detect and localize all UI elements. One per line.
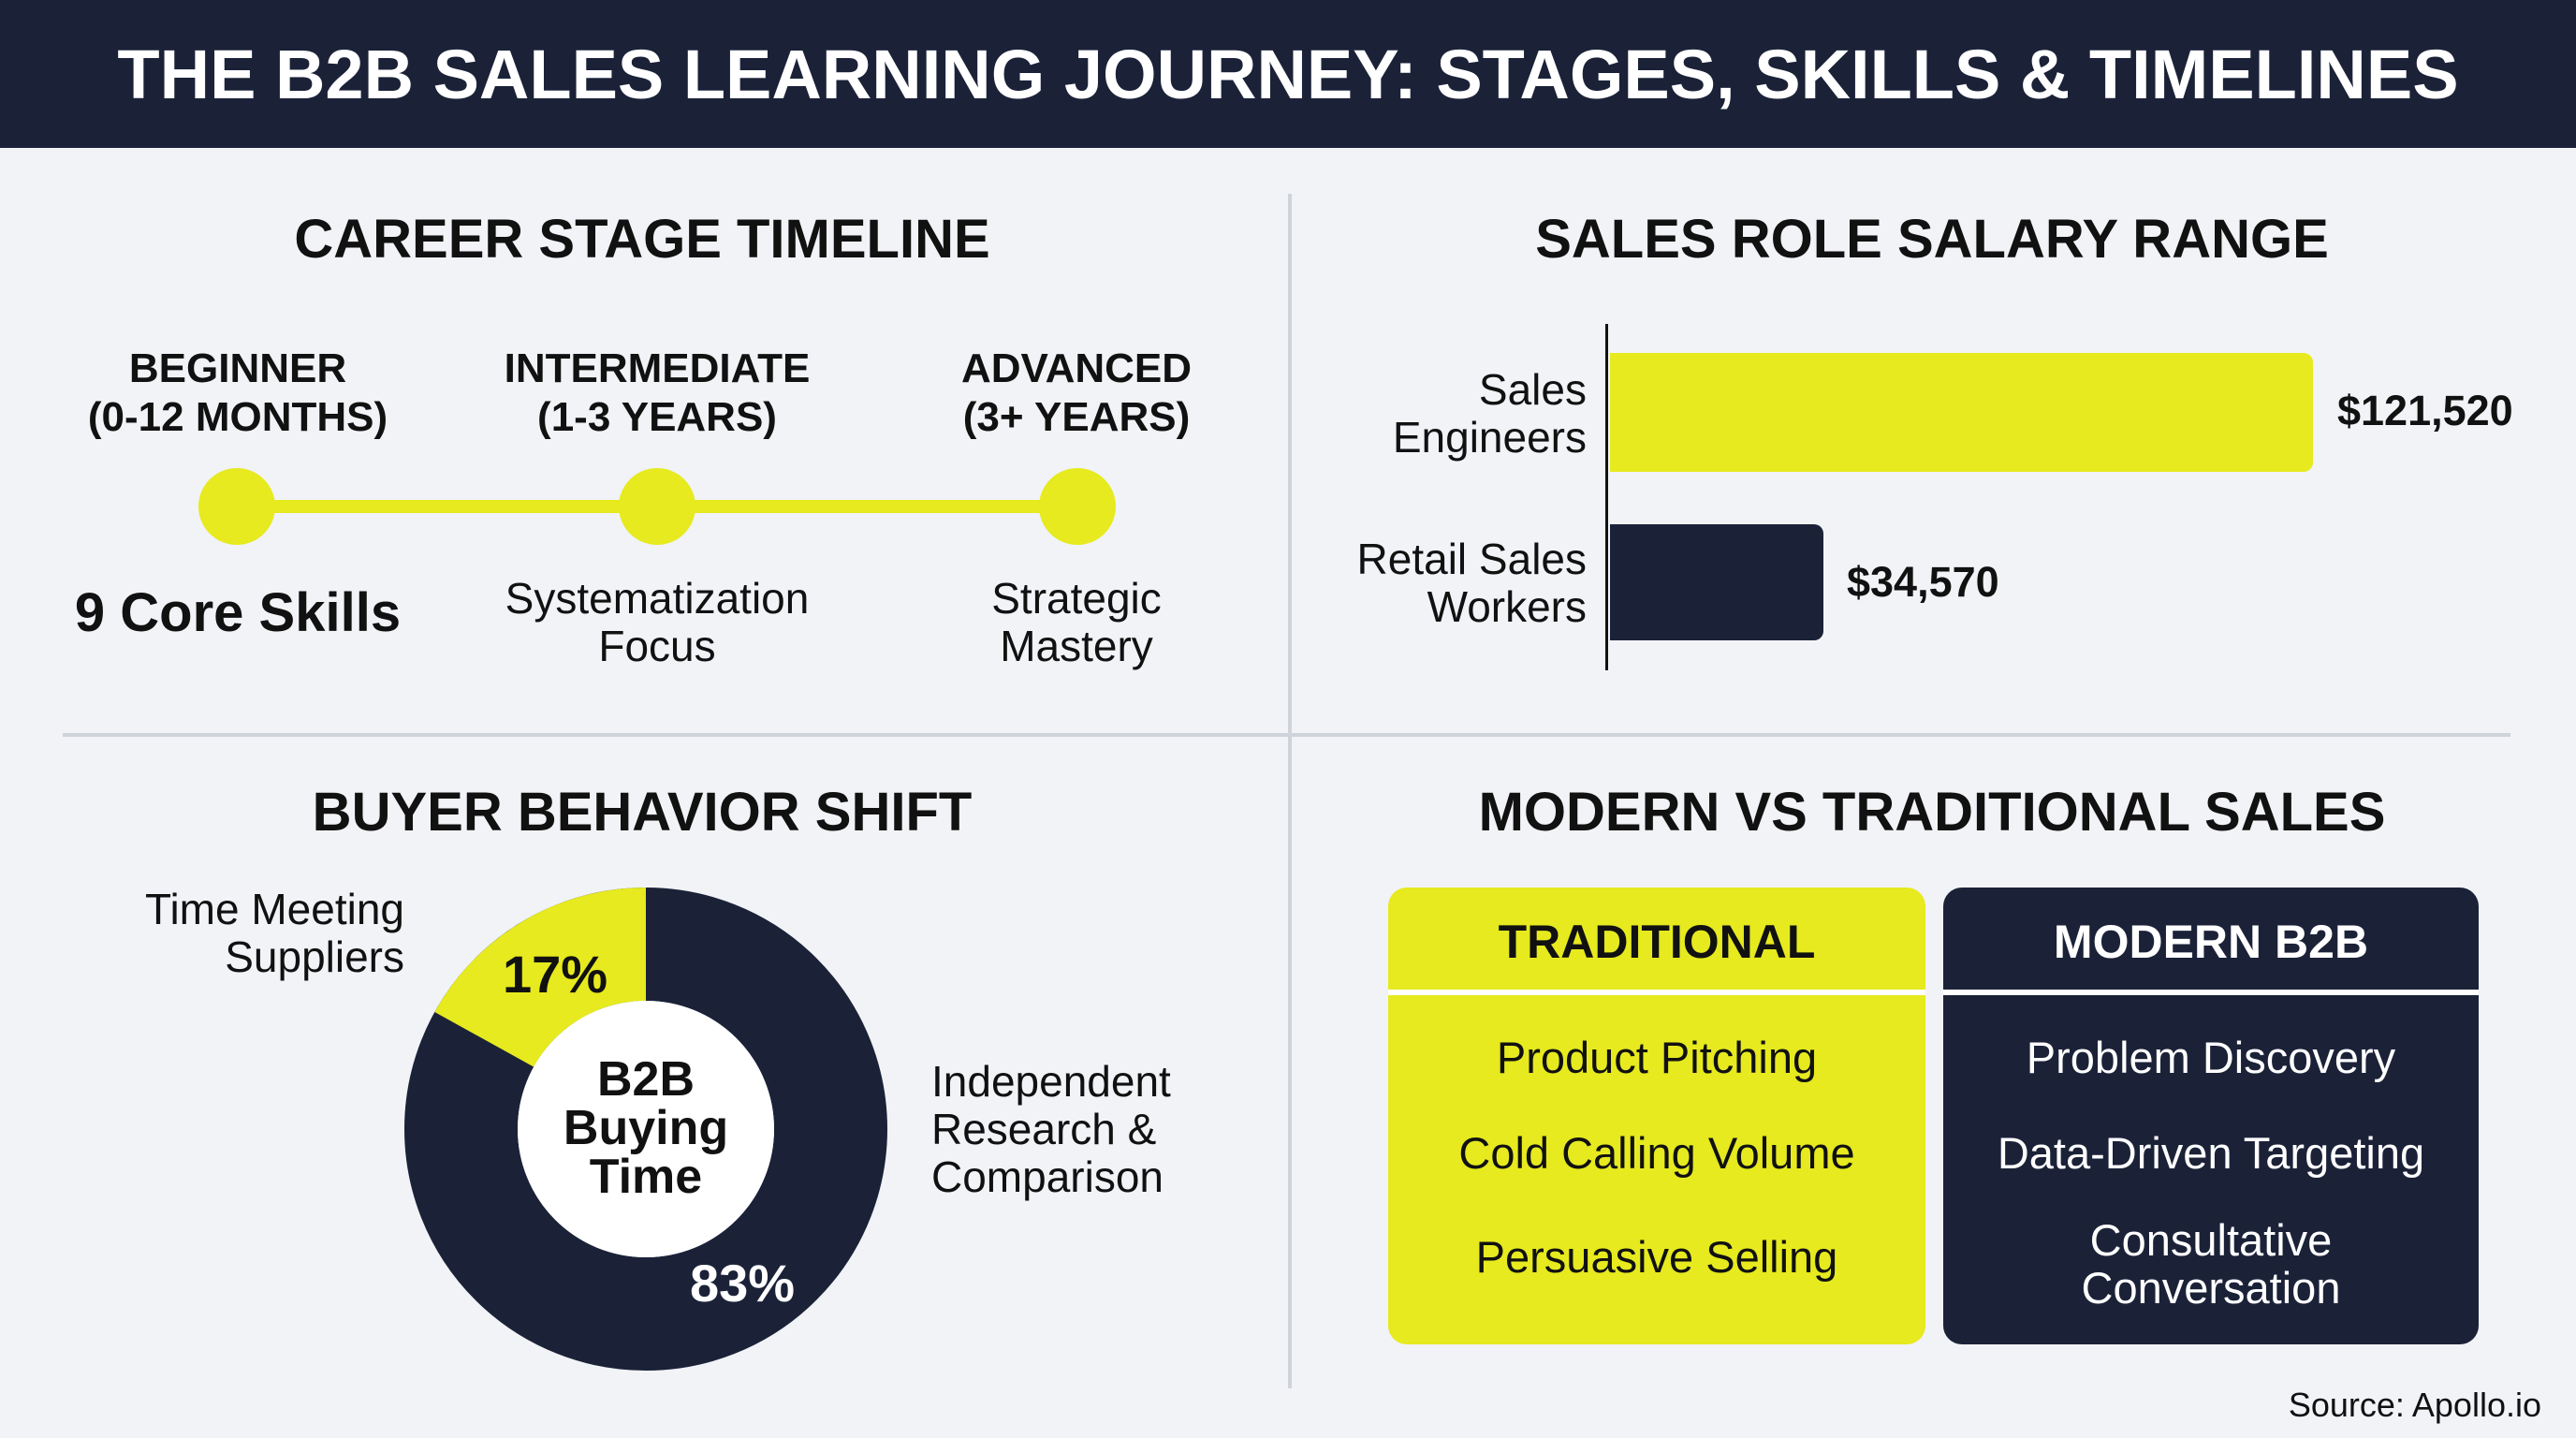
stage text: systematization focus	[505, 574, 809, 670]
header banner	[0, 0, 2576, 148]
donut chart: Buying	[564, 1101, 728, 1155]
panel: modern vs traditional	[1388, 782, 2479, 1344]
bar: sales engineers	[1393, 353, 2513, 472]
panel: career stage timeline	[75, 209, 1192, 670]
box: modern b2b: Consultative	[2090, 1215, 2332, 1265]
donut chart: 83%	[690, 1254, 795, 1313]
box: modern b2b: Data-Driven Targeting	[1998, 1128, 2424, 1178]
label: independent research: Research &	[931, 1105, 1156, 1153]
box: modern b2b: Conversation	[2082, 1263, 2340, 1313]
heading: modern vs traditional: MODERN VS TRADITIONAL SALES	[1479, 782, 2385, 843]
label: time meeting suppliers: Time Meeting	[145, 885, 404, 933]
label: independent research: Comparison	[931, 1152, 1164, 1201]
stage text: strategic mastery: Mastery	[1000, 622, 1153, 670]
label: time meeting suppliers: Suppliers	[225, 932, 404, 981]
label: independent research	[931, 1057, 1171, 1201]
donut chart: Time	[590, 1150, 702, 1204]
bar: sales engineers: Sales	[1479, 365, 1587, 414]
box: traditional: Cold Calling Volume	[1458, 1128, 1855, 1178]
box: modern b2b	[1943, 888, 2479, 1344]
box: traditional: TRADITIONAL	[1499, 916, 1815, 968]
heading: buyer behavior shift: BUYER BEHAVIOR SHIFT	[313, 782, 972, 843]
stage label: advanced: ADVANCED	[961, 345, 1192, 391]
bar: sales engineers: $121,520	[2337, 387, 2513, 434]
donut chart: 17%	[503, 945, 607, 1004]
bar: sales engineers: Engineers	[1393, 413, 1587, 462]
panel: salary range	[1357, 209, 2513, 670]
bar: retail sales workers: Workers	[1427, 582, 1587, 631]
stage text: systematization focus: Focus	[598, 622, 716, 670]
stage label: beginner: BEGINNER	[129, 345, 346, 391]
box: traditional: Persuasive Selling	[1476, 1232, 1837, 1282]
bar: retail sales workers	[1357, 524, 1999, 640]
box: traditional	[1388, 888, 1925, 1344]
stage label: intermediate	[505, 345, 810, 440]
stage label: beginner: (0-12 MONTHS)	[88, 394, 388, 440]
panel: buyer behavior shift	[145, 782, 1171, 1201]
label: independent research: Independent	[931, 1057, 1171, 1106]
heading: salary range: SALES ROLE SALARY RANGE	[1535, 209, 2329, 270]
bar: retail sales workers: Retail Sales	[1357, 535, 1587, 583]
stage label: advanced	[961, 345, 1192, 440]
title: THE B2B SALES LEARNING JOURNEY: STAGES, SKILLS & TIMELINES	[117, 36, 2459, 113]
stage text: strategic mastery	[991, 574, 1162, 670]
stage label: intermediate: INTERMEDIATE	[505, 345, 810, 391]
box: modern b2b: Problem Discovery	[2027, 1033, 2395, 1082]
label: time meeting suppliers	[145, 885, 404, 981]
bar: retail sales workers: $34,570	[1847, 558, 1999, 606]
stage label: advanced: (3+ YEARS)	[963, 394, 1190, 440]
box: modern b2b: MODERN B2B	[2054, 916, 2368, 968]
stage text: 9 core skills: 9 Core Skills	[75, 582, 401, 643]
box: traditional: Product Pitching	[1497, 1033, 1817, 1082]
donut chart: B2B	[597, 1052, 695, 1107]
timeline line with dots	[198, 468, 1116, 545]
stage label: intermediate: (1-3 YEARS)	[537, 394, 777, 440]
heading: career stage timeline: CAREER STAGE TIMELINE	[294, 209, 990, 270]
stage text: systematization focus: Systematization	[505, 574, 809, 623]
stage label: beginner	[88, 345, 388, 440]
stage text: strategic mastery: Strategic	[991, 574, 1162, 623]
source note: Source: Apollo.io	[2289, 1386, 2541, 1424]
